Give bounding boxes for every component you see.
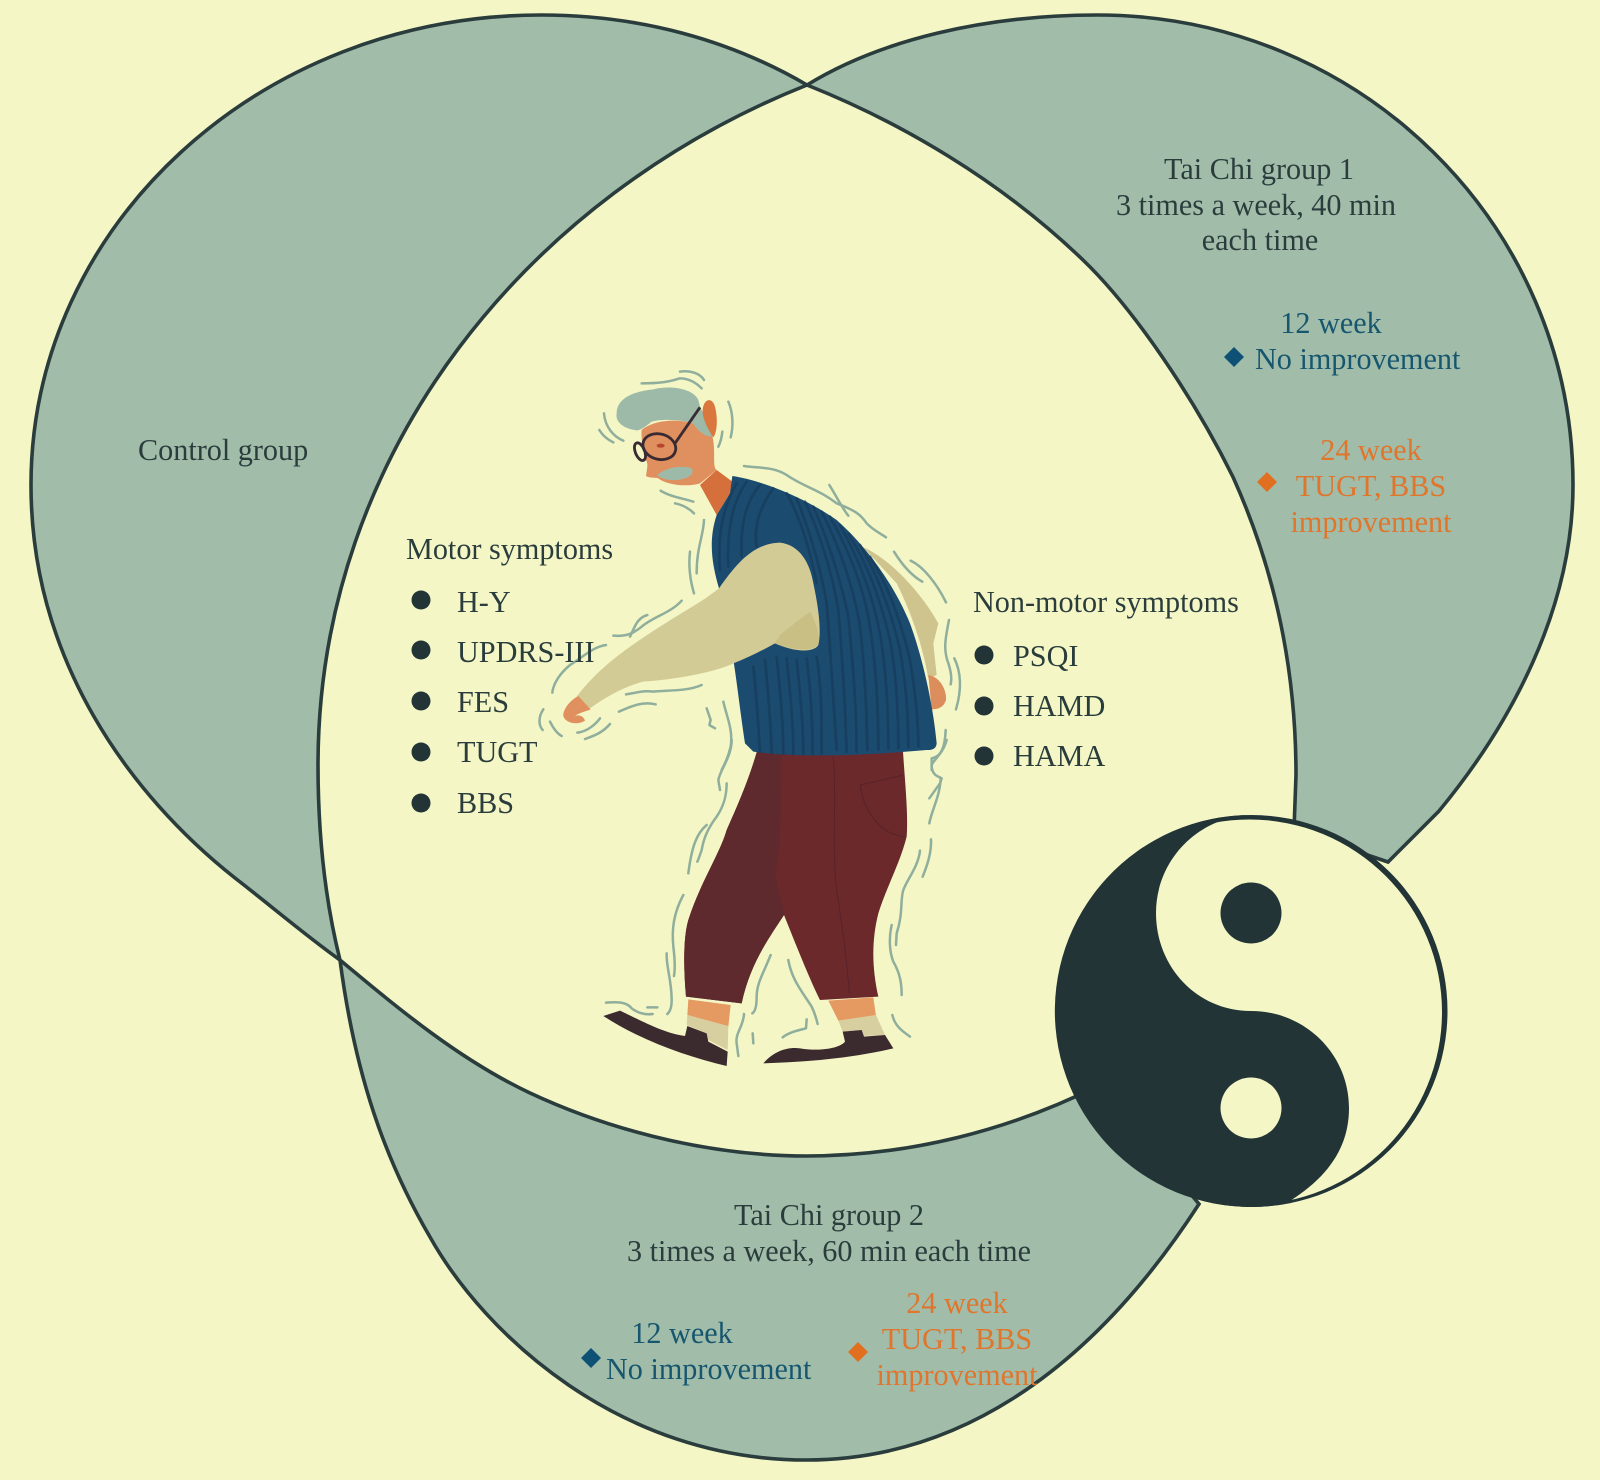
callout: group 1 24 week: 24 week [1320, 433, 1423, 467]
right shoe [763, 1030, 893, 1063]
text: Tai Chi group 1: 3 times a week, 40 min [1116, 188, 1396, 222]
back trouser leg shade [684, 747, 784, 1003]
list: non-motor symptoms: PSQI [1013, 639, 1078, 673]
list: motor symptoms: H-Y [457, 585, 511, 619]
left ankle [687, 999, 731, 1027]
tremor lines: lower [606, 740, 947, 1056]
face [641, 421, 717, 485]
human figure with tremor [539, 371, 960, 1066]
mustache [657, 467, 693, 480]
callout: group 1 24 week: TUGT, BBS [1296, 469, 1446, 503]
back hand [928, 675, 946, 709]
list: motor symptoms: TUGT [457, 735, 537, 769]
trousers [684, 747, 907, 1003]
list: non-motor symptoms: HAMD [1013, 689, 1105, 723]
back arm [863, 547, 938, 678]
icon: yin yang [1055, 815, 1448, 1207]
vest stripes [719, 482, 918, 754]
callout: group 1 12 week: No improvement [1255, 342, 1461, 376]
lobe: Tai Chi group 1 [807, 15, 1573, 862]
eye [657, 444, 665, 448]
hair [616, 388, 712, 437]
sleeve shade [775, 612, 819, 649]
right ankle [828, 997, 876, 1021]
front hand [563, 696, 591, 723]
lower body [603, 740, 947, 1066]
left shoe [603, 1011, 728, 1066]
glasses [632, 407, 700, 463]
neck [700, 470, 732, 515]
text: Tai Chi group 2: Tai Chi group 2 [734, 1198, 924, 1232]
list: non-motor symptoms: HAMA [1013, 739, 1105, 773]
callout: group 2 12 week [581, 1316, 812, 1386]
text: Tai Chi group 1: Tai Chi group 1 [1164, 152, 1354, 186]
left sock [687, 1015, 728, 1050]
list: motor symptoms: UPDRS-III [457, 635, 595, 669]
callout: group 2 12 week: 12 week [631, 1316, 734, 1350]
lobe: Tai Chi group 2 [340, 960, 1199, 1460]
callout: group 1 12 week [1224, 306, 1461, 376]
list: motor symptoms: BBS [457, 786, 514, 820]
small dark dot [1220, 882, 1282, 944]
text: Tai Chi group 2: 3 times a week, 60 min each time [627, 1234, 1031, 1268]
ear [703, 400, 717, 437]
small light dot [1220, 1078, 1282, 1138]
upper body [539, 371, 960, 770]
callout: group 2 24 week [848, 1286, 1038, 1392]
callout: group 2 24 week: 24 week [906, 1286, 1009, 1320]
label: control group: Control group [138, 433, 308, 467]
front sleeve [577, 543, 820, 708]
callout: group 2 12 week: No improvement [606, 1352, 812, 1386]
vest [712, 476, 937, 755]
list: motor symptoms: Motor symptoms [406, 532, 613, 566]
list: non-motor symptoms [973, 585, 1239, 773]
text: Tai Chi group 1: each time [1202, 223, 1318, 257]
list: motor symptoms [406, 532, 613, 820]
callout: group 2 24 week: improvement [877, 1358, 1038, 1392]
trouser seams [833, 757, 903, 993]
callout: group 1 24 week [1257, 433, 1452, 539]
callout: group 1 24 week: improvement [1291, 505, 1452, 539]
right sock [838, 1015, 885, 1036]
list: motor symptoms: FES [457, 685, 509, 719]
list: non-motor symptoms: Non-motor symptoms [973, 585, 1239, 619]
tremor lines: upper [539, 371, 960, 770]
callout: group 1 12 week: 12 week [1280, 306, 1383, 340]
callout: group 2 24 week: TUGT, BBS [882, 1322, 1032, 1356]
lobe: control group [31, 15, 807, 960]
